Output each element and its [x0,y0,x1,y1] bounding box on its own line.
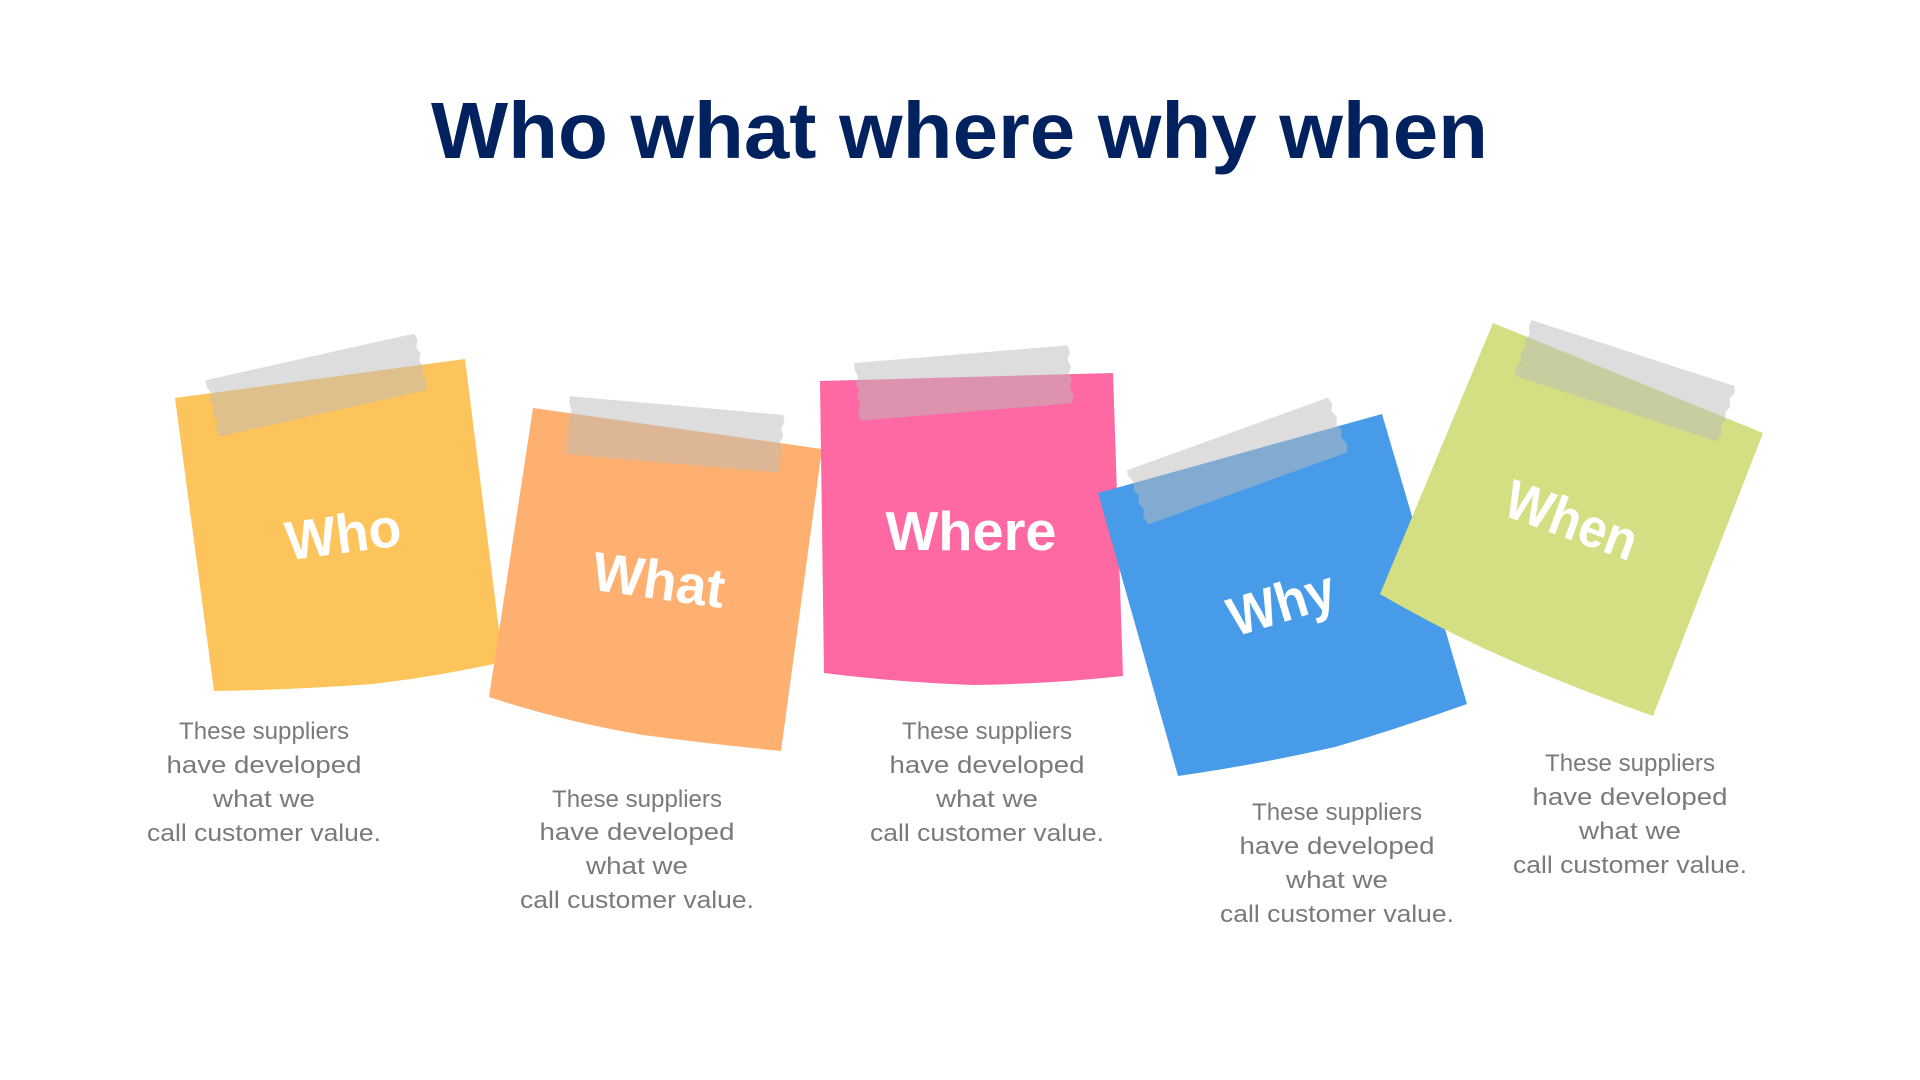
label: why: Why [1220,557,1343,649]
text block: when description: have developed [1532,784,1728,811]
tape: who [205,333,429,437]
note: where paper [820,373,1123,685]
panel: when note [1380,320,1763,716]
panel: where note [820,345,1123,685]
tape: why [1127,397,1349,525]
text block: where description: have developed [890,752,1084,779]
text block: why description: have developed [1240,833,1434,860]
text block: who description: have developed [166,752,362,779]
tape: where [854,345,1074,421]
text block: when description: what we [1578,818,1681,845]
tape: when [1513,320,1737,442]
text block: where description [870,718,1104,847]
text block: when description: call customer value. [1513,852,1747,879]
text block: what description: have developed [540,819,734,846]
note: who paper [175,359,503,691]
label: who: Who [282,496,405,572]
label: what: What [589,540,729,620]
text block: why description: call customer value. [1220,901,1454,928]
panel: what note [489,396,822,751]
tape: what [565,396,785,473]
panel: who note [175,333,503,691]
text block: who description: what we [212,786,315,813]
text block: where description: what we [935,786,1038,813]
text block: when description: These suppliers [1545,750,1715,777]
text block: when description [1513,750,1747,879]
text block: where description: These suppliers [902,718,1072,745]
text block: what description: These suppliers [552,786,722,813]
note: when paper [1380,323,1763,716]
label: when: When [1497,467,1647,572]
text block: what description: call customer value. [520,887,754,914]
text block: why description: what we [1285,867,1388,894]
text block: why description: These suppliers [1252,799,1422,826]
text block: who description: These suppliers [179,718,349,745]
text block: where description: call customer value. [870,820,1104,847]
panel: why note [1098,397,1467,776]
note: why paper [1098,414,1467,776]
text block: who description: call customer value. [147,820,381,847]
text block: what description: what we [585,853,688,880]
label: where: Where [886,500,1056,562]
text block: who description [147,718,381,847]
text block: why description [1220,799,1454,928]
text block: what description [520,786,754,914]
title: Who what where why when [431,86,1488,175]
note: what paper [489,408,822,751]
